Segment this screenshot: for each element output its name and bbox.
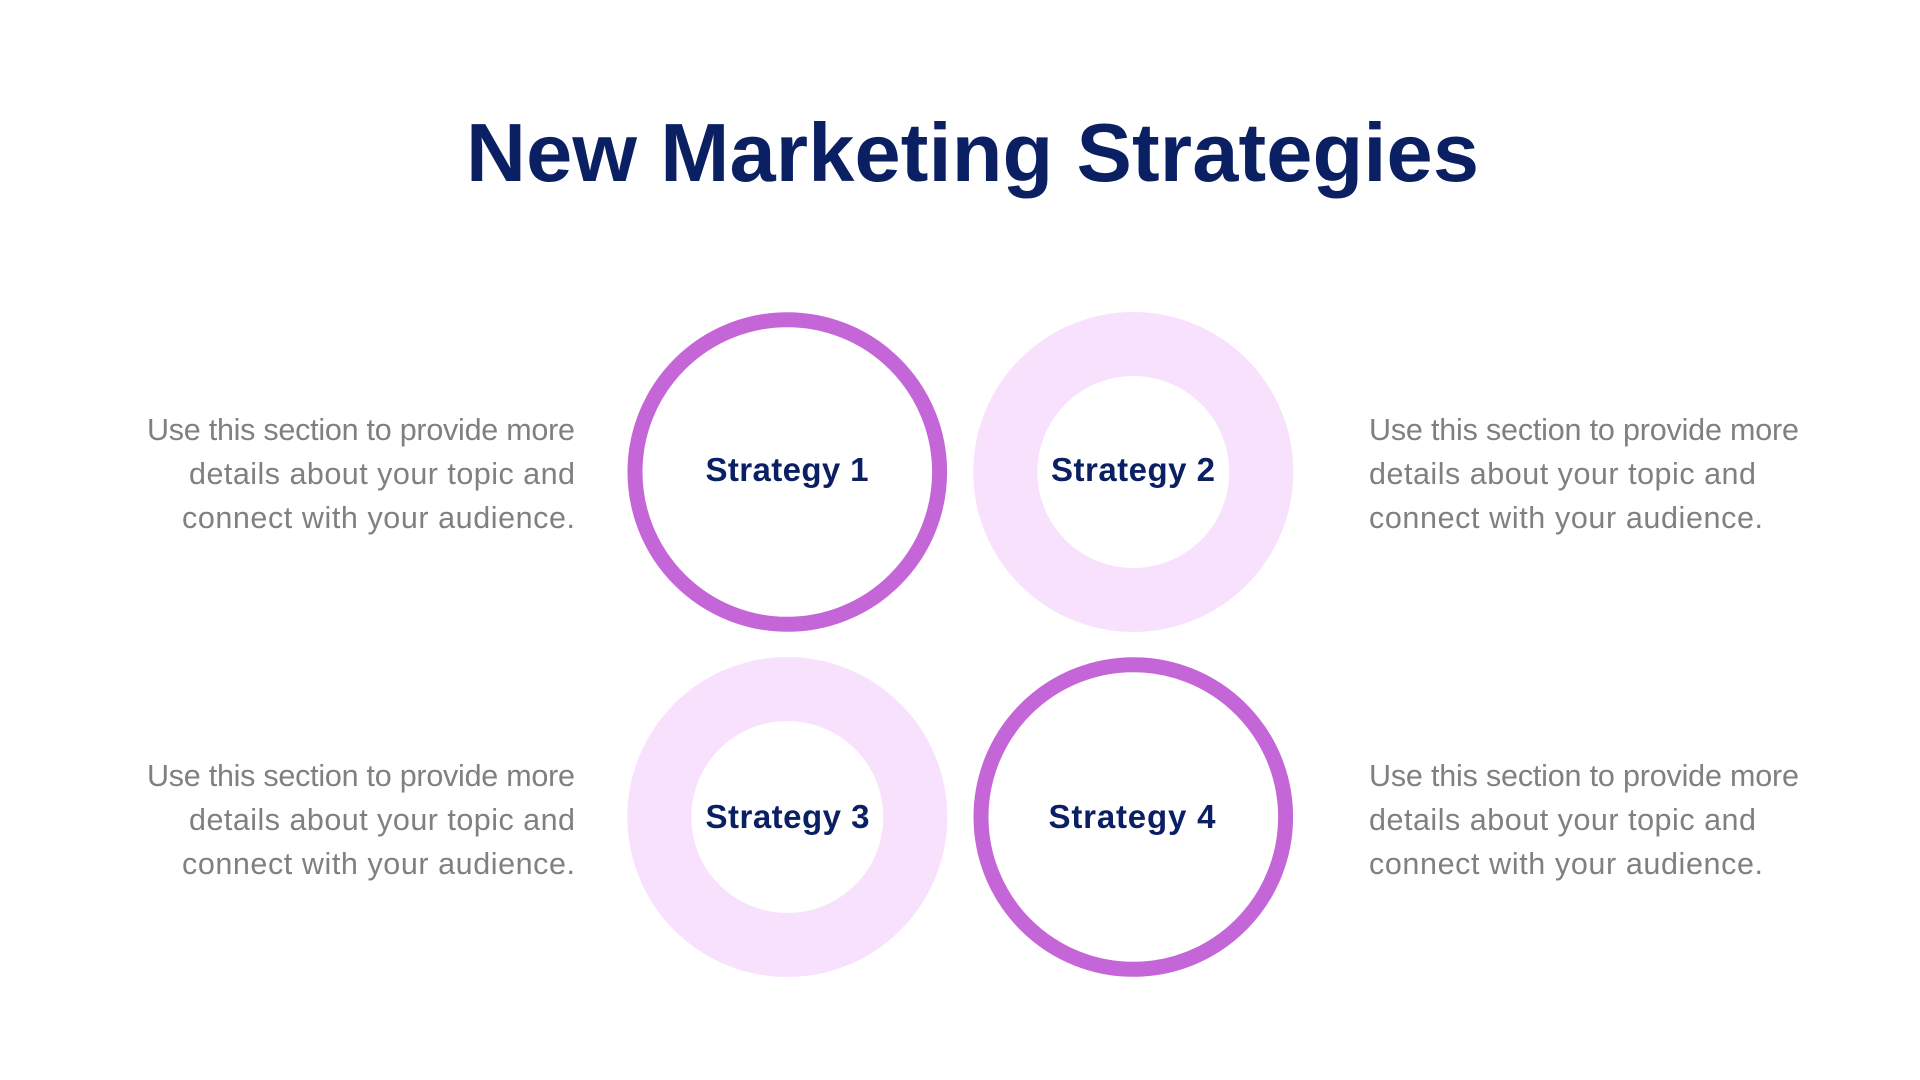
title: New Marketing Strategies xyxy=(466,106,1479,199)
panel: strategy 2 circle xyxy=(1005,344,1261,600)
panel: strategy 2 description: connect with your audience. xyxy=(1369,501,1763,535)
panel: strategy 1 circle xyxy=(635,320,940,624)
panel: strategy 4 description: connect with your audience. xyxy=(1369,847,1763,881)
panel: strategy 4 description: details about your topic and xyxy=(1369,803,1756,837)
panel: strategy 3 description: connect with your audience. xyxy=(182,847,575,881)
panel: strategy 1 description: details about your topic and xyxy=(189,457,575,491)
panel: strategy 2 description: details about your topic and xyxy=(1369,457,1756,491)
panel: strategy 4 circle: Strategy 4 xyxy=(1048,798,1216,835)
panel: strategy 1 description: Use this section to provide more xyxy=(147,413,575,447)
panel: strategy 4 description: Use this section to provide more xyxy=(1369,759,1799,793)
panel: strategy 3 description xyxy=(147,759,575,881)
panel: strategy 1 description: connect with your audience. xyxy=(182,501,575,535)
panel: strategy 4 description xyxy=(1369,759,1799,881)
panel: strategy 1 circle: Strategy 1 xyxy=(706,451,868,488)
panel: strategy 3 circle: Strategy 3 xyxy=(706,798,870,835)
panel: strategy 1 description xyxy=(147,413,575,535)
panel: strategy 2 circle: Strategy 2 xyxy=(1051,451,1215,488)
panel: strategy 3 circle xyxy=(659,689,915,945)
panel: strategy 3 description: Use this section to provide more xyxy=(147,759,575,793)
panel: strategy 2 description xyxy=(1369,413,1799,535)
panel: strategy 2 description: Use this section to provide more xyxy=(1369,413,1799,447)
panel: strategy 3 description: details about your topic and xyxy=(189,803,575,837)
panel: strategy 4 circle xyxy=(981,665,1286,969)
